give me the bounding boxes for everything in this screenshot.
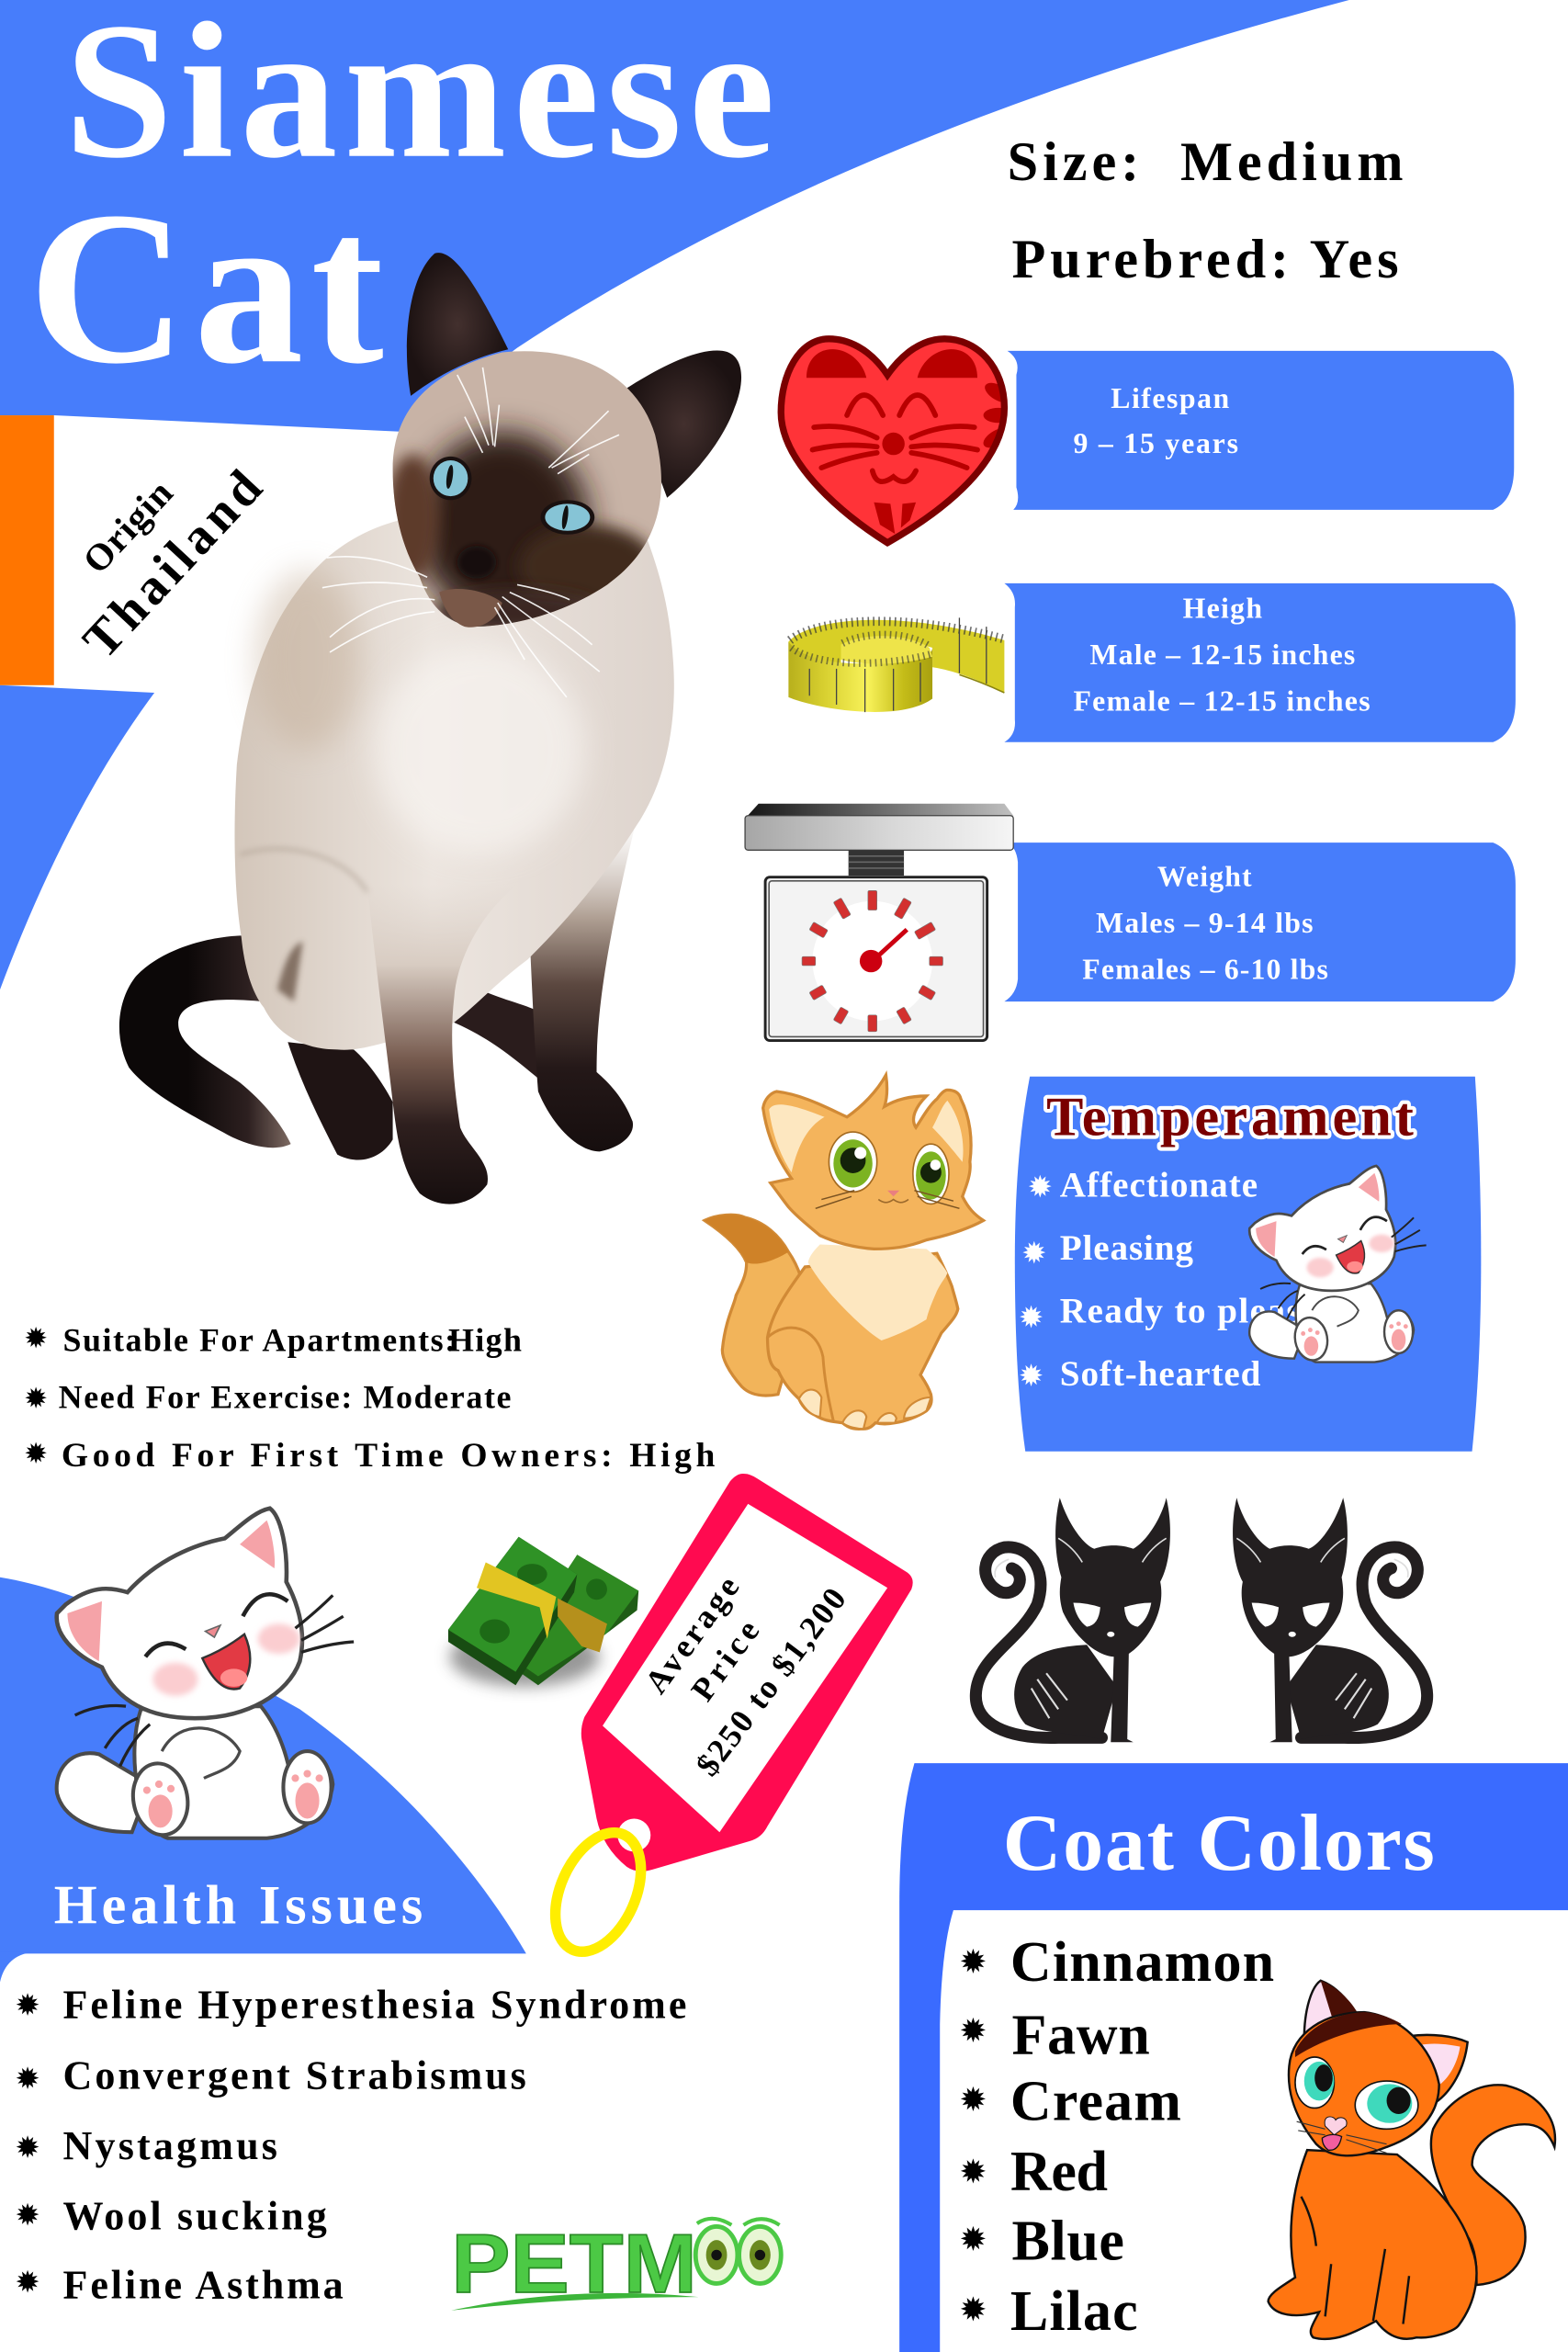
origin label	[73, 460, 273, 670]
near front leg	[367, 885, 517, 1204]
suitable rating: High	[448, 1321, 522, 1358]
panel: coat colors	[899, 1763, 1568, 2352]
health issues heading: Health Issues	[54, 1875, 423, 1937]
coat colors heading: Coat Colors	[1003, 1798, 1435, 1888]
right ear	[626, 351, 741, 498]
illustration: white kitten	[57, 1509, 354, 1839]
bullet: ✹	[959, 2013, 987, 2051]
lifespan label: Lifespan	[1111, 382, 1229, 414]
weight label: Weight	[1157, 860, 1252, 892]
illustration: black cat left	[976, 1498, 1170, 1742]
color: cinnamon: Cinnamon	[1010, 1931, 1274, 1994]
issue 2: Convergent Strabismus	[63, 2052, 526, 2098]
background: top blue banner	[0, 0, 1349, 432]
bullet: ✹	[959, 2154, 987, 2191]
male weight: Males – 9-14 lbs	[1096, 907, 1314, 939]
color: fawn: Fawn	[1012, 2005, 1150, 2067]
bullet: ✹	[15, 2198, 40, 2233]
bullet: ✹	[15, 2130, 40, 2165]
color: lilac: Lilac	[1010, 2280, 1138, 2343]
face shading	[385, 432, 657, 633]
illustration: orange kitten	[1269, 1981, 1555, 2339]
trait: affectionate: Affectionate	[1060, 1165, 1258, 1204]
need for exercise: Need For Exercise: Moderate	[59, 1378, 511, 1415]
near hind paw	[288, 1042, 393, 1160]
icon: kitchen scale	[745, 804, 1013, 1041]
bullet: ✹	[24, 1438, 48, 1471]
list: suitability	[24, 1321, 716, 1475]
temperament heading: Temperament	[1046, 1086, 1414, 1148]
bullet: ✹	[1021, 1236, 1047, 1271]
icon: cat heart	[781, 339, 1015, 543]
origin label: Origin	[74, 472, 181, 582]
bullet: ✹	[959, 1944, 987, 1982]
body shading: back	[254, 570, 360, 750]
left ear	[407, 253, 508, 396]
tag string	[538, 1819, 658, 1965]
purebred text: Purebred: Yes	[1012, 229, 1399, 290]
height label: Heigh	[1183, 592, 1262, 624]
panel: weight	[1004, 842, 1516, 1001]
bullet: ✹	[1019, 1300, 1043, 1335]
muzzle	[439, 589, 502, 628]
bullet: ✹	[1028, 1170, 1053, 1204]
trait: pleasing: Pleasing	[1060, 1228, 1193, 1268]
logo wordmark: PETM	[451, 2217, 697, 2311]
good for first time owners: Good For First Time Owners: High	[62, 1437, 716, 1475]
head	[393, 351, 661, 627]
icon: money stacks	[448, 1537, 638, 1687]
icon: price tag	[538, 1474, 913, 1965]
body	[234, 517, 674, 1050]
background: left blue wedge	[0, 685, 154, 989]
bullet: ✹	[24, 1322, 48, 1355]
color: blue: Blue	[1012, 2210, 1124, 2272]
bullet: ✹	[1019, 1359, 1043, 1394]
far hind leg	[454, 992, 539, 1080]
orange origin bar	[0, 415, 54, 685]
left eye	[430, 457, 471, 500]
country label: Thailand	[73, 460, 273, 670]
logo eye left	[695, 2219, 738, 2283]
price label: average: Average	[637, 1569, 746, 1700]
bullet: ✹	[15, 2061, 40, 2096]
body shading: chest highlight	[375, 645, 584, 854]
illustration: ginger kitten	[705, 1075, 984, 1429]
bullet: ✹	[15, 1987, 40, 2022]
female height: Female – 12-15 inches	[1073, 685, 1371, 718]
list: health issues	[15, 1983, 686, 2308]
size text: Size: Medium	[1008, 131, 1403, 193]
bullet: ✹	[959, 2291, 987, 2329]
logo: Petmoo	[451, 2217, 781, 2311]
icon: measuring tape	[788, 617, 1004, 712]
trait: ready to please: Ready to please	[1060, 1291, 1317, 1330]
bullet: ✹	[24, 1382, 48, 1415]
female weight: Females – 6-10 lbs	[1082, 954, 1328, 986]
body shading: hip fold	[277, 942, 303, 1001]
panel: health issues header	[0, 1577, 526, 1953]
male height: Male – 12-15 inches	[1089, 639, 1355, 671]
panel: lifespan	[1008, 351, 1514, 510]
bullet: ✹	[959, 2082, 987, 2120]
color: cream: Cream	[1010, 2071, 1181, 2133]
nose	[457, 546, 496, 579]
title: Cat: Cat	[28, 166, 384, 409]
body shading: haunch top	[240, 849, 367, 892]
price label: value: $250 to $1,200	[689, 1581, 853, 1782]
issue 4: Wool sucking	[63, 2194, 327, 2239]
issue 3: Nystagmus	[63, 2123, 277, 2168]
lifespan value: 9 – 15 years	[1073, 427, 1238, 459]
whiskers	[322, 368, 619, 697]
issue 5: Feline Asthma	[63, 2263, 344, 2308]
bullet: ✹	[15, 2265, 40, 2300]
panel: temperament	[1015, 1077, 1481, 1452]
price label: price: Price	[683, 1613, 766, 1708]
health list panel corner	[0, 1952, 33, 1982]
far front leg	[525, 817, 637, 1151]
tail	[119, 935, 291, 1148]
panel: height	[1004, 583, 1516, 742]
illustration: realistic Siamese cat	[119, 253, 741, 1204]
trait: soft-hearted: Soft-hearted	[1060, 1354, 1261, 1394]
illustration: black cat right	[1233, 1498, 1427, 1742]
logo eye right	[739, 2219, 781, 2283]
issue 1: Feline Hyperesthesia Syndrome	[63, 1983, 686, 2028]
logo underline	[451, 2293, 698, 2311]
illustration: small white kitten	[1249, 1166, 1427, 1363]
color: red: Red	[1010, 2141, 1108, 2203]
suitable for apartments: Suitable For Apartments:	[63, 1321, 456, 1358]
right eye	[540, 500, 594, 535]
bullet: ✹	[959, 2222, 987, 2259]
